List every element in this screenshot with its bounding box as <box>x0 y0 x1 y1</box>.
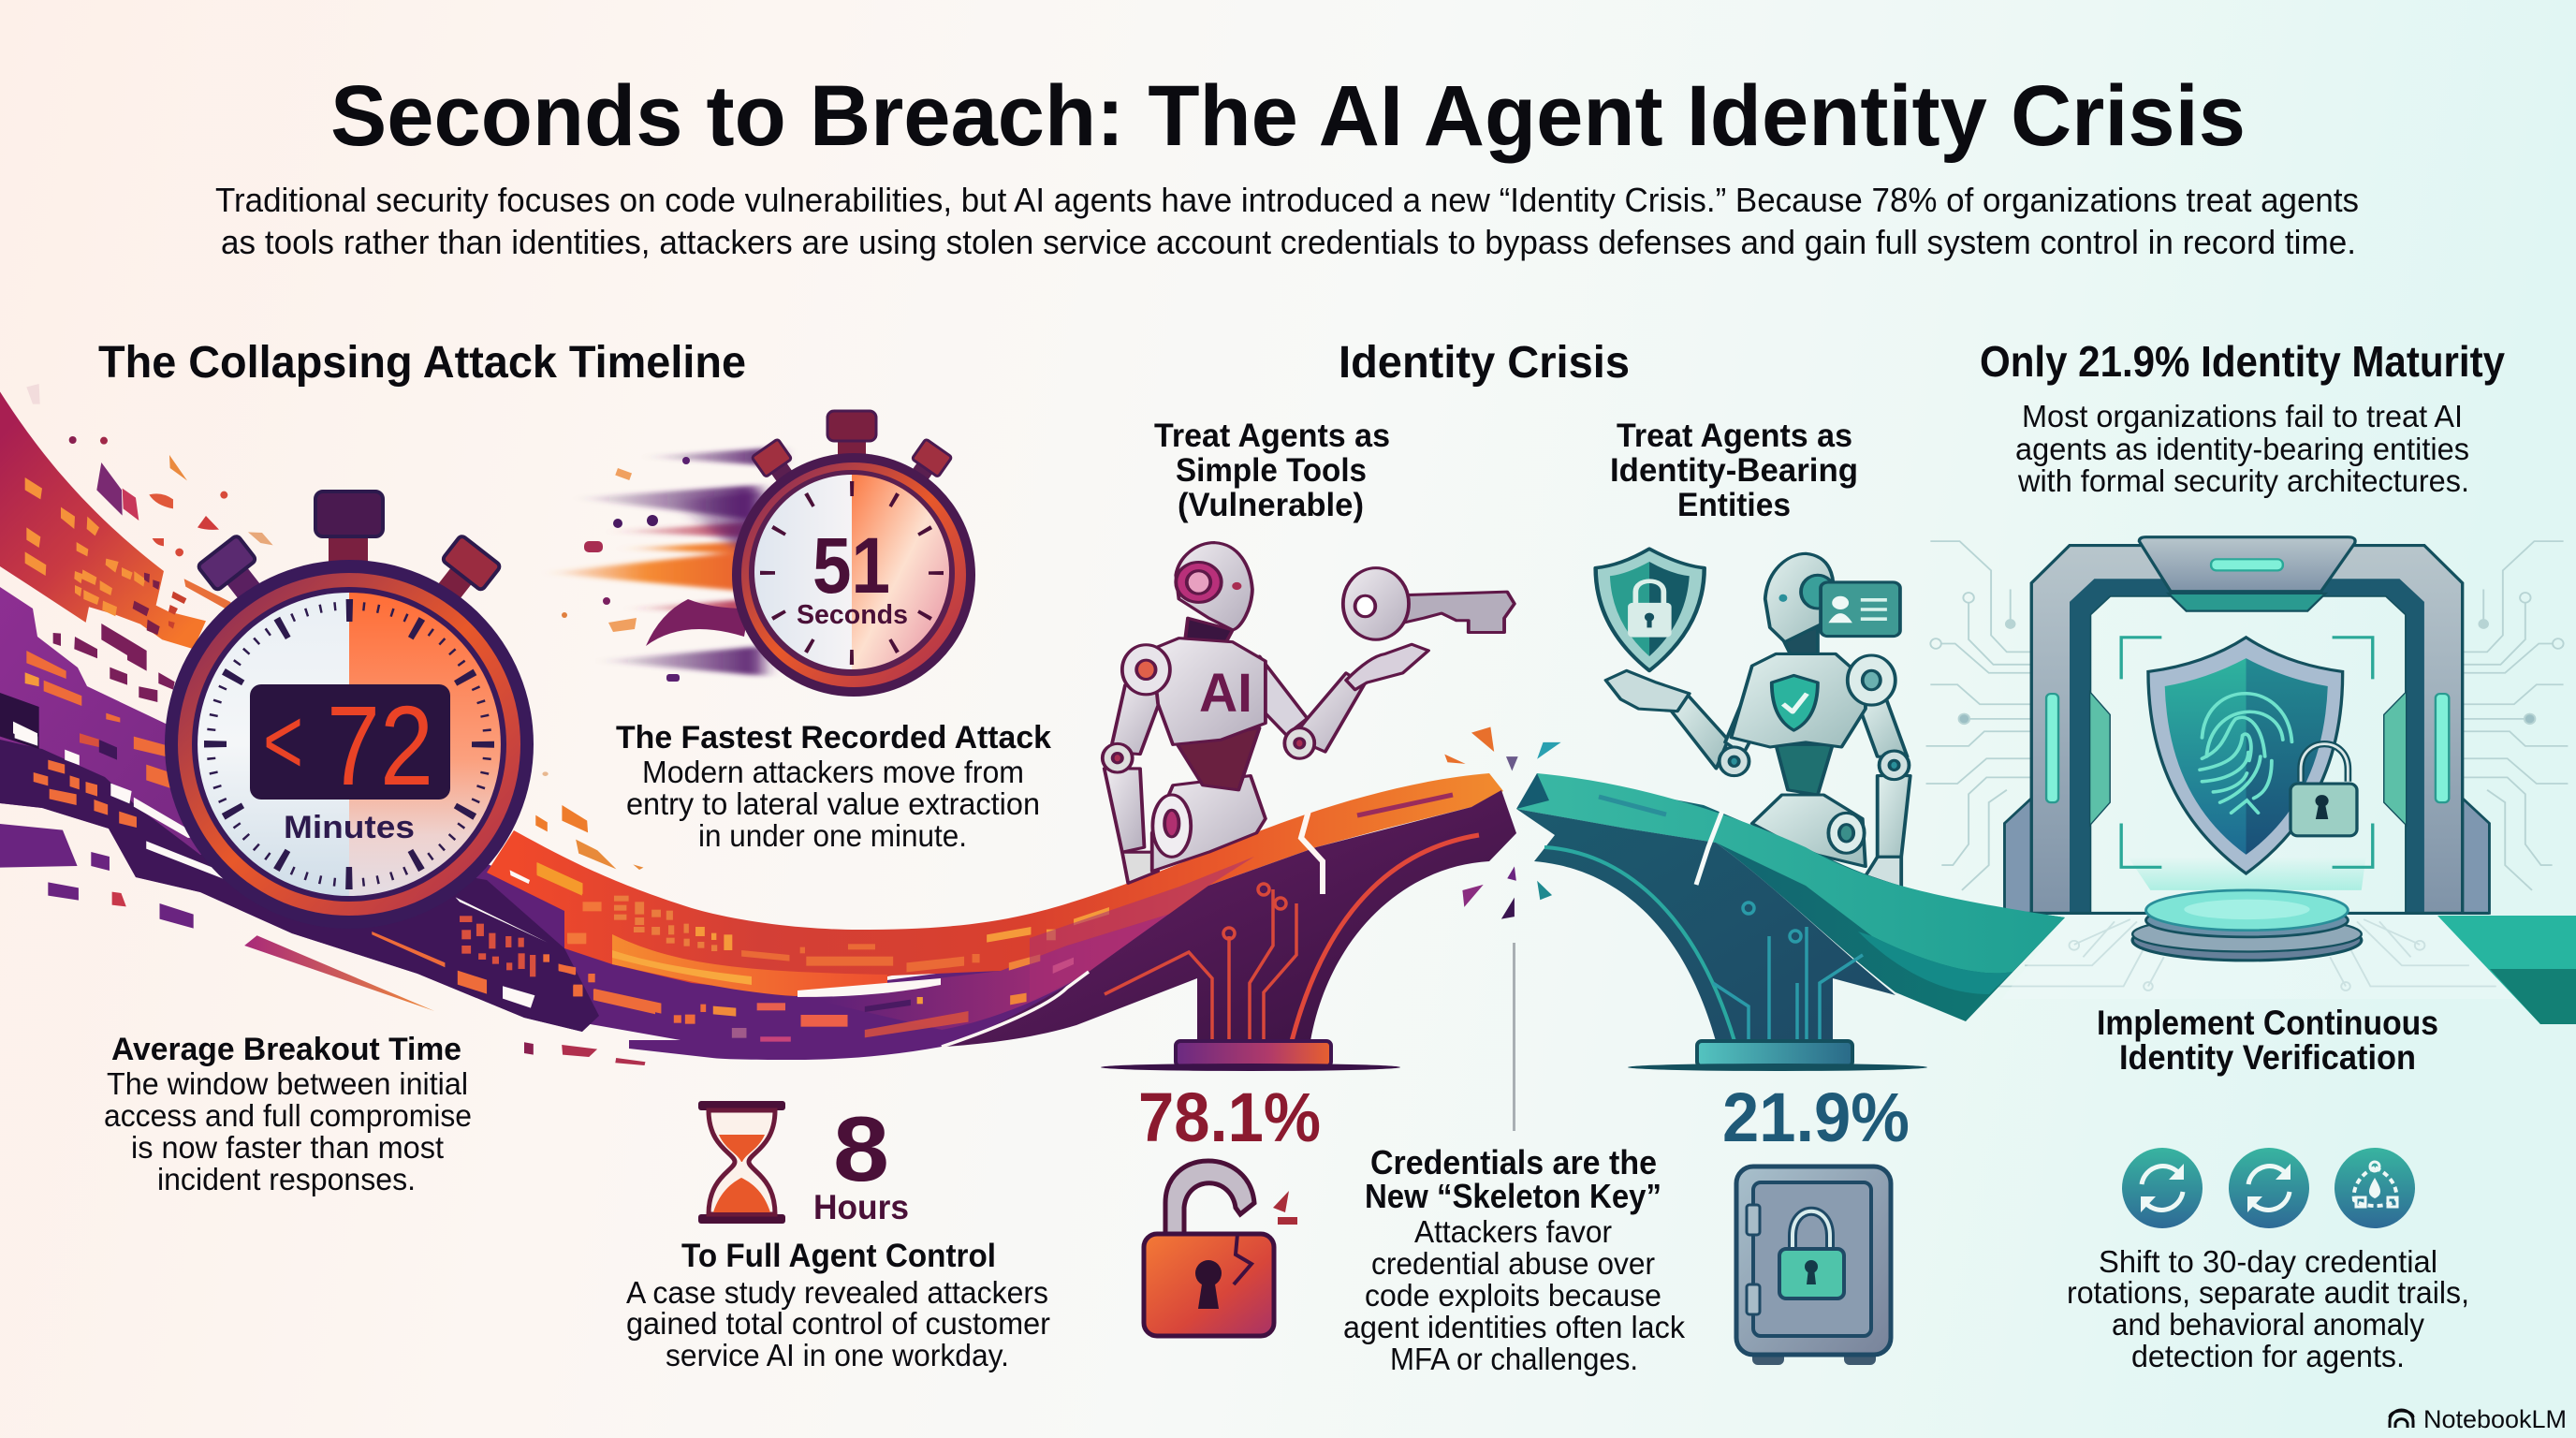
stat: 78.1%: 78.1% <box>1138 1078 1321 1156</box>
title: Seconds to Breach: The AI Agent Identity Crisis <box>330 68 2246 164</box>
label: treat agents as simple tools: Simple Tools <box>1176 452 1367 489</box>
heading: identity maturity: Only 21.9% Identity Maturity <box>1980 337 2505 386</box>
label: treat agents as simple tools <box>1154 418 1390 523</box>
text: average breakout time <box>104 1032 472 1196</box>
icon: hourglass <box>698 1101 785 1224</box>
text: the fastest recorded attack: The Fastest Recorded Attack <box>616 720 1051 756</box>
text: the fastest recorded attack: Modern attackers move from <box>642 755 1024 789</box>
text: credentials are the new skeleton key: Credentials are the <box>1370 1143 1657 1181</box>
text: credentials are the new skeleton key: agent identities often lack <box>1343 1310 1685 1344</box>
ribbon: red-orange top band upper left <box>0 391 231 749</box>
stopwatch: 51 seconds <box>732 411 975 697</box>
text: identity maturity description: Most organizations fail to treat AI <box>2022 399 2463 433</box>
text: credentials are the new skeleton key: credential abuse over <box>1371 1246 1655 1281</box>
heading: identity crisis: Identity Crisis <box>1339 338 1630 388</box>
icon: secure safe <box>1736 1167 1891 1365</box>
text: credentials are the new skeleton key: Attackers favor <box>1414 1214 1612 1249</box>
text: to full agent control: service AI in one workday. <box>666 1338 1009 1372</box>
digital display: < <box>263 689 303 794</box>
icon: ID card <box>1821 582 1900 637</box>
text: shift to 30-day credential rotations: rotations, separate audit trails, <box>2067 1275 2469 1310</box>
text: shift to 30-day credential rotations <box>2067 1244 2469 1373</box>
intro paragraph: Traditional security focuses on code vulnerabilities, but AI agents have introduced a new “Identity Crisis.” Because 78% of organizations treat agents <box>215 181 2359 219</box>
number 51: 51 <box>812 521 890 609</box>
stat: 8 hours: 8 <box>833 1097 889 1200</box>
label: treat agents as simple tools: Treat Agents as <box>1154 418 1390 454</box>
divider line <box>1513 943 1515 1131</box>
text: credentials are the new skeleton key: MFA or challenges. <box>1390 1342 1638 1376</box>
text: to full agent control <box>626 1238 1050 1372</box>
text: the fastest recorded attack: entry to lateral value extraction <box>626 786 1040 821</box>
ribbon data pixels, central section <box>524 863 1109 1065</box>
label: treat agents as identity-bearing entities: Identity-Bearing <box>1610 452 1858 489</box>
text: credentials are the new skeleton key <box>1343 1143 1685 1376</box>
heading: implement continuous identity verification: Identity Verification <box>2119 1038 2416 1077</box>
text: average breakout time: access and full compromise <box>104 1098 472 1133</box>
heading: implement continuous identity verification <box>2097 1004 2438 1077</box>
broken bridge: protected side <box>1516 773 2065 1071</box>
text: shift to 30-day credential rotations: detection for agents. <box>2131 1339 2405 1373</box>
logo: NotebookLM: NotebookLM <box>2423 1405 2567 1433</box>
text: to full agent control: A case study revealed attackers <box>626 1275 1048 1310</box>
stat: 21.9%: 21.9% <box>1722 1078 1910 1156</box>
digital display: 72 <box>327 682 433 809</box>
stat: 8 hours: Hours <box>813 1188 909 1226</box>
motion trails behind small stopwatch <box>548 448 777 682</box>
background circuit traces and security portal <box>1926 537 2568 999</box>
text: shift to 30-day credential rotations: Shift to 30-day credential <box>2099 1244 2437 1279</box>
robot: vulnerable agent with key <box>1103 543 1515 883</box>
text: to full agent control: To Full Agent Control <box>681 1238 996 1274</box>
icon: anomaly detection <box>2334 1148 2415 1228</box>
intro paragraph <box>215 181 2359 261</box>
text: shift to 30-day credential rotations: and behavioral anomaly <box>2112 1307 2424 1342</box>
broken bridge: vulnerable side <box>942 790 1516 1071</box>
teal ribbon right segment <box>2437 916 2576 1024</box>
text: credentials are the new skeleton key: code exploits because <box>1365 1278 1661 1313</box>
label: treat agents as identity-bearing entities: Entities <box>1677 487 1791 523</box>
icon: broken padlock <box>1144 1161 1297 1336</box>
icon: skeleton key <box>1343 568 1515 639</box>
heading: collapsing attack timeline: The Collapsing Attack Timeline <box>98 338 746 388</box>
scattered fragments upper left <box>26 384 273 556</box>
ribbon detail pieces, left section <box>0 730 655 1014</box>
icon: padlock shield <box>1596 549 1705 670</box>
ribbon: red-orange highway band <box>487 773 1503 997</box>
intro paragraph: as tools rather than identities, attackers are using stolen service account credentials to bypass defenses and gain full system control in record time. <box>221 223 2356 261</box>
label: minutes: Minutes <box>284 810 415 845</box>
label: treat agents as identity-bearing entities: Treat Agents as <box>1617 418 1852 454</box>
heading: implement continuous identity verification: Implement Continuous <box>2097 1004 2438 1042</box>
text: average breakout time: The window between initial <box>107 1066 468 1101</box>
text: average breakout time: Average Breakout Time <box>111 1032 461 1067</box>
icon: audit rotation <box>2229 1148 2309 1228</box>
text: to full agent control: gained total control of customer <box>626 1306 1050 1341</box>
shattered fragments at the break <box>1444 727 1561 919</box>
ribbon: purple lower data band <box>0 587 1236 1060</box>
text: the fastest recorded attack: in under one minute. <box>698 818 967 853</box>
text: credentials are the new skeleton key: New “Skeleton Key” <box>1365 1177 1661 1215</box>
robot: secured agent with shield and ID card <box>1596 549 1910 888</box>
stat: 8 hours <box>813 1097 909 1226</box>
label: treat agents as simple tools: (Vulnerable) <box>1178 487 1364 523</box>
label: seconds: Seconds <box>797 600 908 630</box>
digital display <box>250 682 450 809</box>
text: identity maturity description: with formal security architectures. <box>2017 463 2469 498</box>
icon: credential rotation <box>2122 1148 2203 1228</box>
text: the fastest recorded attack <box>616 720 1051 853</box>
stopwatch: 72 minutes <box>165 492 534 929</box>
text: identity maturity description <box>2015 399 2469 498</box>
text: identity maturity description: agents as identity-bearing entities <box>2015 432 2469 466</box>
label: treat agents as identity-bearing entities <box>1610 418 1858 523</box>
text: average breakout time: is now faster than most <box>131 1130 444 1165</box>
label: AI on robot chest: AI <box>1199 663 1252 724</box>
text: average breakout time: incident responses. <box>157 1162 416 1196</box>
